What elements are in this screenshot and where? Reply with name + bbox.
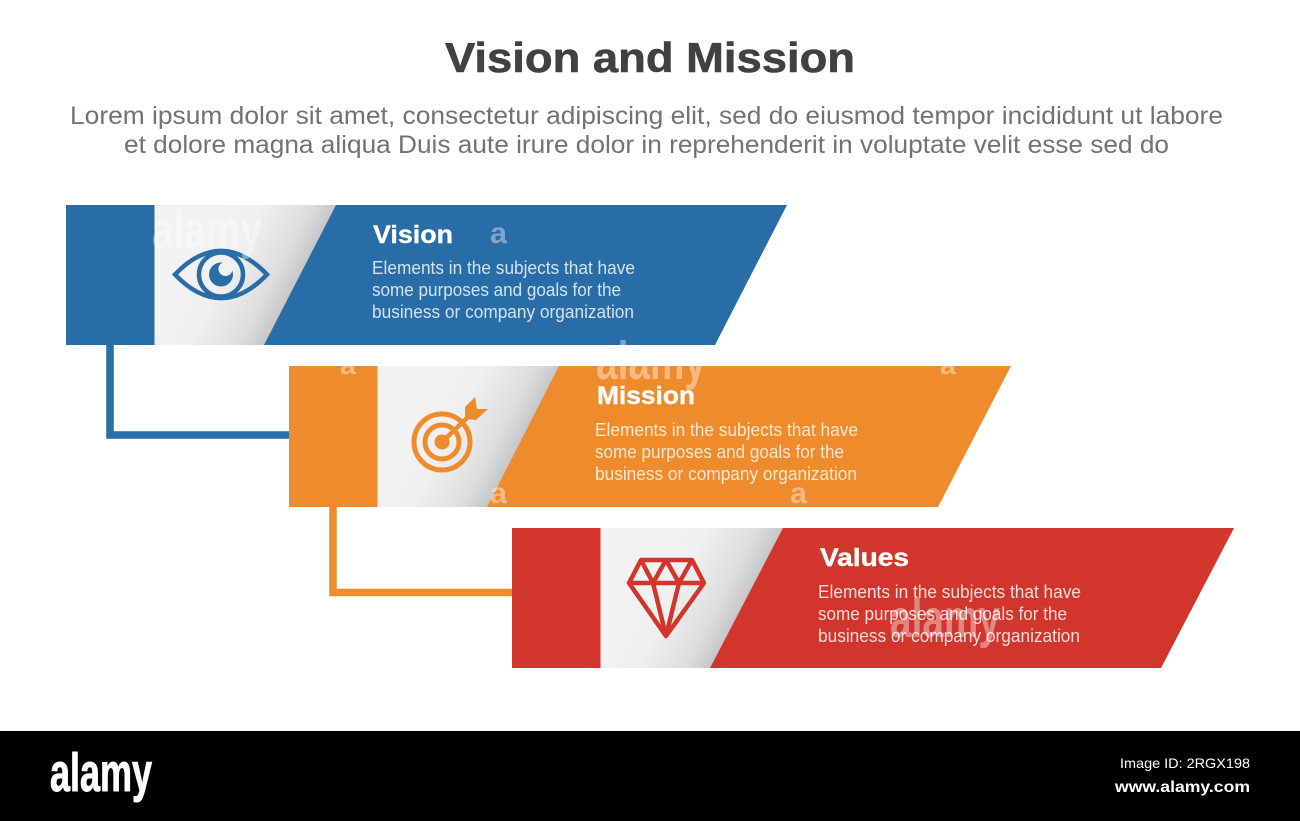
watermarks: a: [790, 477, 807, 510]
banner: [289, 366, 1011, 507]
panel: vision: [66, 205, 787, 345]
heading: Mission: [597, 382, 695, 410]
intro paragraph: et dolore magna aliqua Duis aute irure dolor in reprehenderit in voluptate velit esse sed do: [124, 131, 1169, 159]
description: Elements in the subjects that have: [595, 420, 858, 440]
watermarks: alamy: [152, 200, 262, 260]
icon: diamond: [629, 560, 704, 636]
icon: eye: [175, 251, 267, 298]
description: Elements in the subjects that have: [372, 258, 635, 278]
banner: [66, 205, 787, 345]
heading: Vision: [373, 221, 453, 249]
watermarks: a: [490, 477, 507, 510]
description: some purposes and goals for the: [818, 604, 1067, 624]
description: [372, 258, 635, 322]
watermarks: a: [340, 350, 357, 380]
icon background: [154, 205, 336, 345]
watermarks: alamy: [890, 589, 1000, 649]
website: www.alamy.com: [1114, 779, 1250, 796]
watermarks: alamy: [596, 331, 706, 391]
watermarks: a: [490, 217, 507, 250]
watermarks: [152, 200, 1000, 649]
icon: target with arrow: [414, 397, 488, 470]
description: [818, 582, 1081, 646]
heading: Values: [820, 544, 909, 572]
icon background: [600, 528, 783, 668]
title: Vision and Mission: [445, 34, 855, 81]
description: [595, 420, 858, 484]
panel: mission: [289, 366, 1011, 507]
description: business or company organization: [372, 302, 634, 322]
watermarks: a: [940, 350, 957, 380]
panel: values: [512, 528, 1234, 668]
intro paragraph: Lorem ipsum dolor sit amet, consectetur adipiscing elit, sed do eiusmod tempor incididunt ut labore: [70, 102, 1223, 130]
connector: vision to mission: [110, 345, 289, 435]
footer bar: [0, 731, 1300, 821]
description: Elements in the subjects that have: [818, 582, 1081, 602]
image id: Image ID: 2RGX198: [1120, 755, 1250, 771]
intro paragraph: [70, 102, 1223, 159]
description: some purposes and goals for the: [372, 280, 621, 300]
description: some purposes and goals for the: [595, 442, 844, 462]
icon background: [378, 366, 559, 507]
description: business or company organization: [818, 626, 1080, 646]
description: business or company organization: [595, 464, 857, 484]
connector: mission to values: [333, 507, 512, 592]
banner: [512, 528, 1234, 668]
footer logo: alamy: [50, 743, 152, 803]
